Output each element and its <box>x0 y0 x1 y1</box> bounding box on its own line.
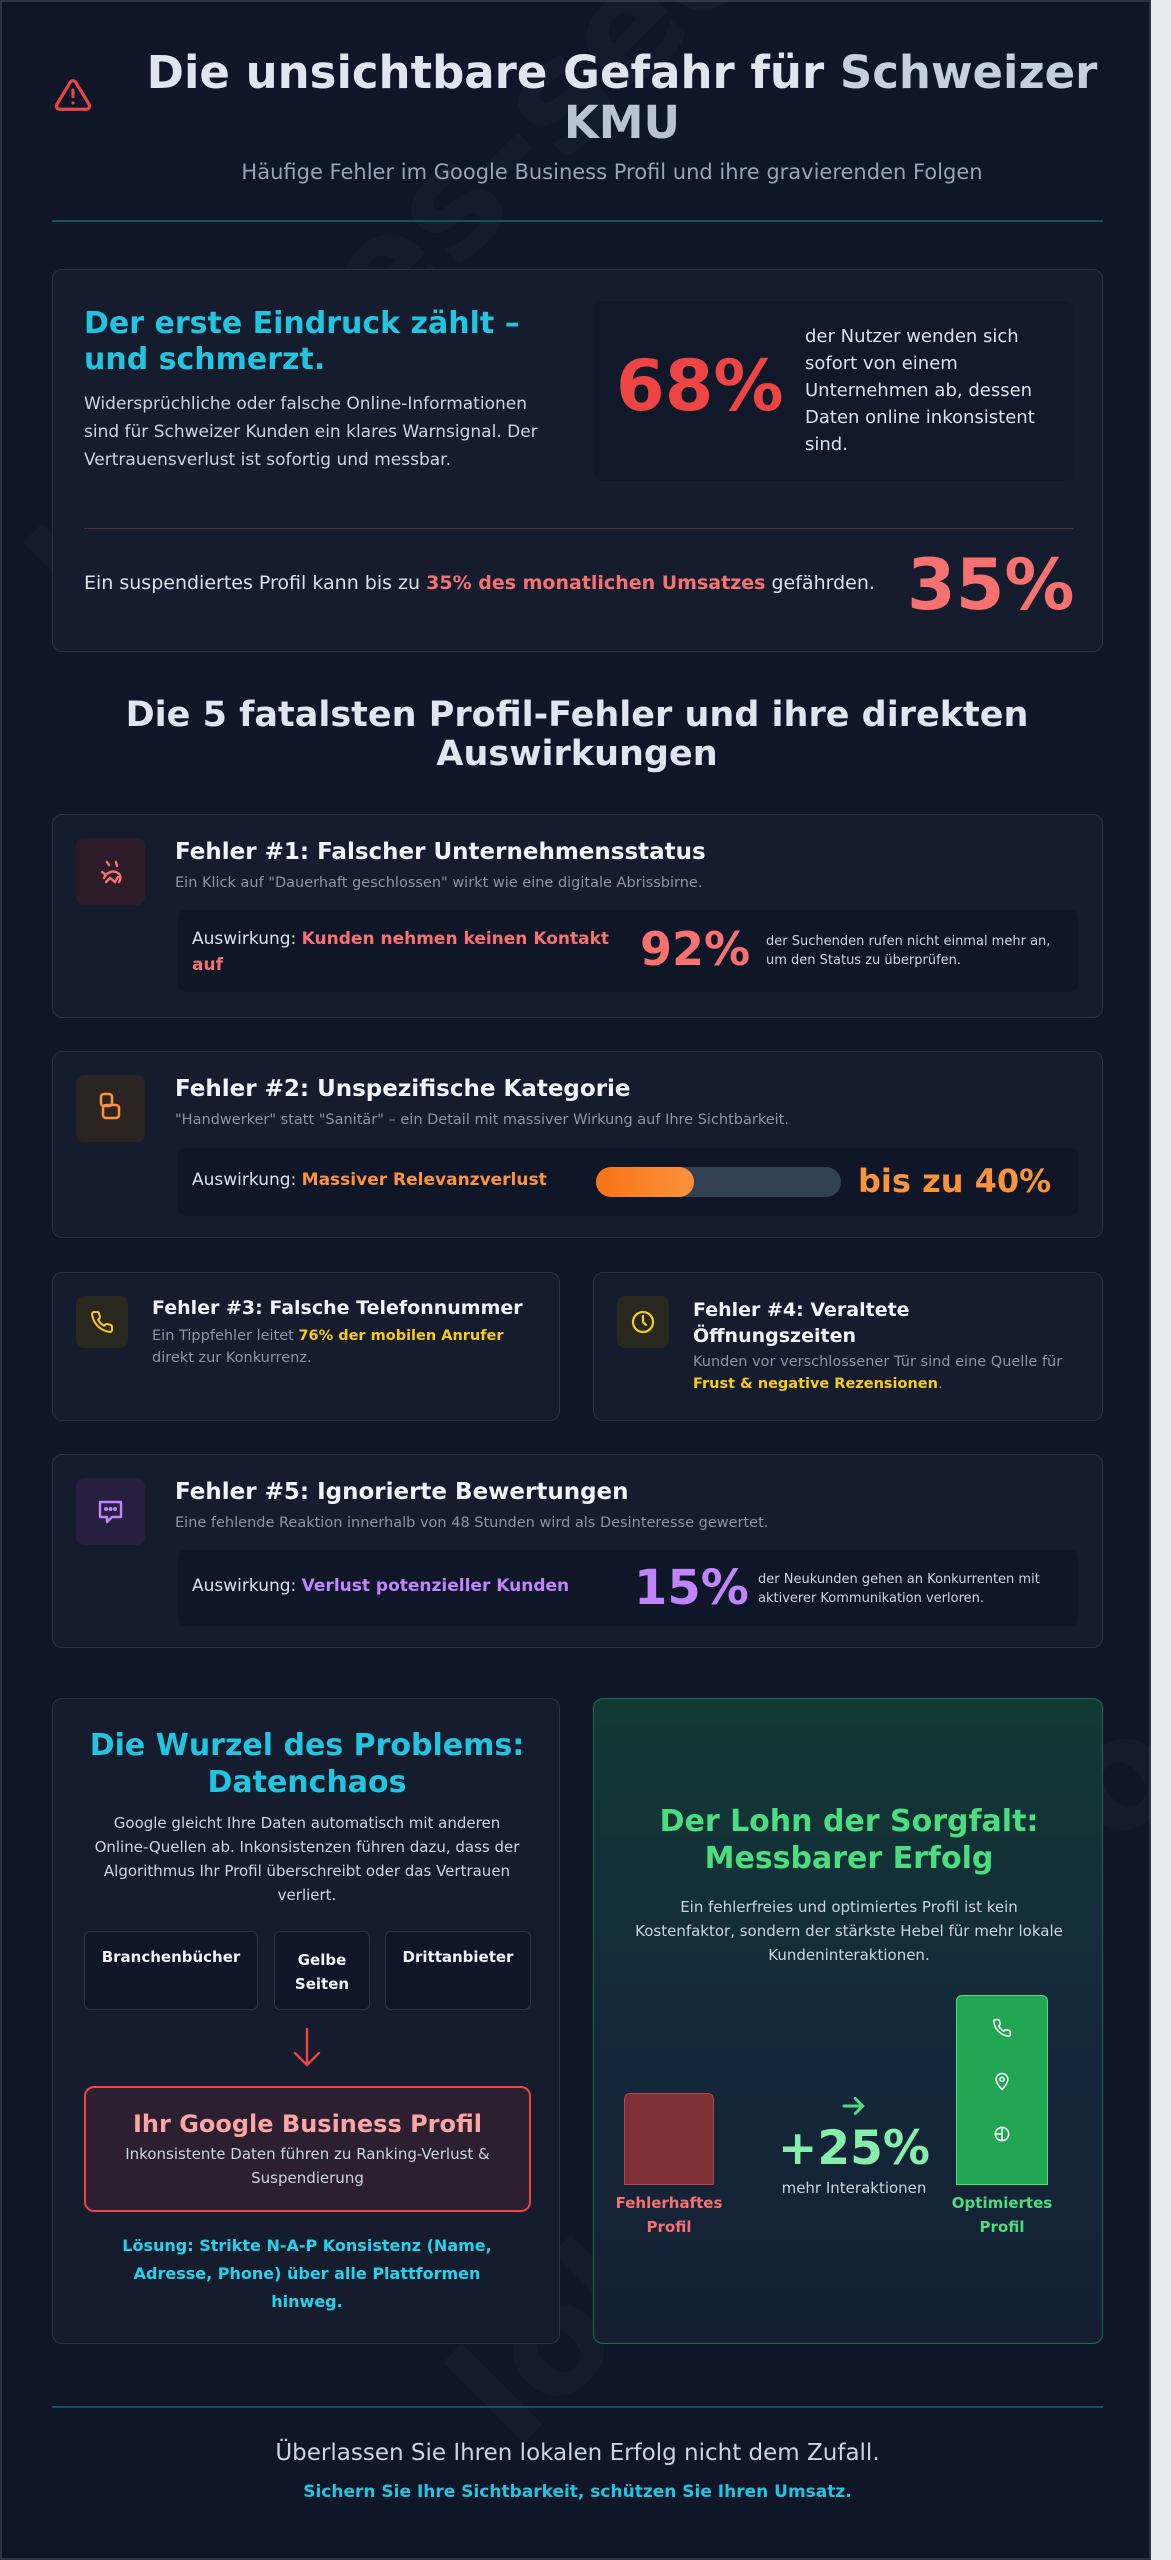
panel: Fehler 2: "Handwerker" statt "Sanitär" – ein Detail mit massiver Wirkung auf Ihre Sichtbarkeit. <box>175 1112 789 1128</box>
heading: Der erste Eindruck zählt – und schmerzt. <box>84 306 520 377</box>
icon: wrecking <box>76 838 145 905</box>
impact box: der Suchenden rufen nicht einmal mehr an, um den Status zu überprüfen. <box>766 934 1050 968</box>
panel: Fehler 2 <box>52 1051 1103 1238</box>
35% statement: Ein suspendiertes Profil kann bis zu 35% des monatlichen Umsatzes gefährden. <box>84 572 875 594</box>
impact box: der Neukunden gehen an Konkurrenten mit aktiverer Kommunikation verloren. <box>758 1572 1040 1606</box>
source boxes: Drittanbieter <box>403 1948 513 1966</box>
GBP box: Inkonsistente Daten führen zu Ranking-Verlust & Suspendierung <box>125 2145 490 2187</box>
source boxes <box>84 1931 531 2010</box>
panel: Fehler 1: Ein Klick auf "Dauerhaft geschlossen" wirkt wie eine digitale Abrissbirne. <box>175 875 702 891</box>
panel: Fehler 4: Kunden vor verschlossener Tür sind eine Quelle für Frust & negative Rezensionen. <box>693 1354 1062 1392</box>
panel: Fehler 1 <box>52 814 1103 1018</box>
panel: success: Optimiertes Profil <box>952 2194 1052 2236</box>
panel: Fehler 5 <box>52 1454 1103 1648</box>
impact box: Auswirkung: Massiver Relevanzverlust <box>192 1170 547 1190</box>
icon: phone <box>76 1296 128 1348</box>
solution: Lösung: Strikte N-A-P Konsistenz (Name, Adresse, Phone) über alle Plattformen hinweg. <box>122 2236 492 2311</box>
comparison chart: mehr Interaktionen <box>782 2179 926 2197</box>
comparison chart: +25% <box>778 2121 930 2176</box>
source boxes: Branchenbücher <box>102 1948 240 1966</box>
heading: Der Lohn der Sorgfalt: Messbarer Erfolg <box>660 1804 1038 1876</box>
footer tagline: Sichern Sie Ihre Sichtbarkeit, schützen Sie Ihren Umsatz. <box>303 2482 852 2502</box>
text: Ein fehlerfreies und optimiertes Profil ist kein Kostenfaktor, sondern der stärkste Hebel für mehr lokale Kundeninteraktionen. <box>635 1898 1063 1964</box>
stat box 68%: 68% <box>616 345 784 427</box>
panel: Fehler 3: Ein Tippfehler leitet 76% der mobilen Anrufer direkt zur Konkurrenz. <box>152 1328 504 1366</box>
panel: success <box>593 1698 1103 2344</box>
subtitle: Häufige Fehler im Google Business Profil und ihre gravierenden Folgen <box>241 160 983 184</box>
impact box: bis zu 40% <box>858 1162 1051 1200</box>
impact box: Auswirkung: Kunden nehmen keinen Kontakt auf <box>192 929 609 975</box>
panel: Fehler 5: Eine fehlende Reaktion innerhalb von 48 Stunden wird als Desinteresse gewertet. <box>175 1515 768 1531</box>
arrow down <box>294 2028 320 2067</box>
impact box: 92% <box>640 922 750 976</box>
text: Google gleicht Ihre Daten automatisch mit anderen Online-Quellen ab. Inkonsistenzen führen dazu, dass der Algorithmus Ihr Profil überschreibt oder das Vertrauen verliert. <box>95 1814 519 1904</box>
impact box <box>178 910 1078 992</box>
impact box <box>178 1148 1078 1216</box>
panel: Fehler 1: Fehler #1: Falscher Unternehmensstatus <box>175 839 706 865</box>
body text: Widersprüchliche oder falsche Online-Informationen sind für Schweizer Kunden ein klares Warnsignal. Der Vertrauensverlust ist sofortig und messbar. <box>84 394 538 470</box>
icon: chat <box>76 1478 145 1545</box>
stat box 68% <box>594 301 1073 481</box>
panel: Fehler 3: Fehler #3: Falsche Telefonnummer <box>152 1297 523 1319</box>
icon: clock <box>617 1296 669 1348</box>
panel: Fehler 5: Fehler #5: Ignorierte Bewertungen <box>175 1479 629 1505</box>
impact box: 15% <box>634 1560 749 1616</box>
panel: Fehler 4: Fehler #4: Veraltete Öffnungszeiten <box>693 1299 910 1347</box>
GBP box <box>84 2086 531 2212</box>
icon: category <box>76 1075 145 1142</box>
panel: Fehler 2: Fehler #2: Unspezifische Kategorie <box>175 1076 631 1102</box>
comparison chart <box>616 1995 1052 2236</box>
panel: root of problem <box>52 1698 560 2344</box>
icon: warning triangle <box>54 79 92 111</box>
stat box 68%: der Nutzer wenden sich sofort von einem Unternehmen ab, dessen Daten online inkonsistent sind. <box>805 326 1035 455</box>
footer text: Überlassen Sie Ihren lokalen Erfolg nicht dem Zufall. <box>275 2440 880 2466</box>
impact box <box>178 1550 1078 1626</box>
progress bar <box>596 1167 841 1197</box>
heading: Die Wurzel des Problems: Datenchaos <box>90 1728 524 1800</box>
panel: first impression: 35% <box>907 544 1075 626</box>
panel: success: Fehlerhaftes Profil <box>616 2194 722 2236</box>
panel: first impression <box>52 269 1103 652</box>
impact box: Auswirkung: Verlust potenzieller Kunden <box>192 1576 569 1596</box>
title: Die unsichtbare Gefahr für Schweizer KMU <box>147 46 1097 149</box>
GBP box: Ihr Google Business Profil <box>133 2110 482 2138</box>
source boxes: Gelbe Seiten <box>295 1951 349 1993</box>
panel: Fehler 3 <box>52 1272 560 1421</box>
section heading: Die 5 fatalsten Profil-Fehler und ihre direkten Auswirkungen <box>126 695 1028 774</box>
panel: Fehler 4 <box>593 1272 1103 1421</box>
